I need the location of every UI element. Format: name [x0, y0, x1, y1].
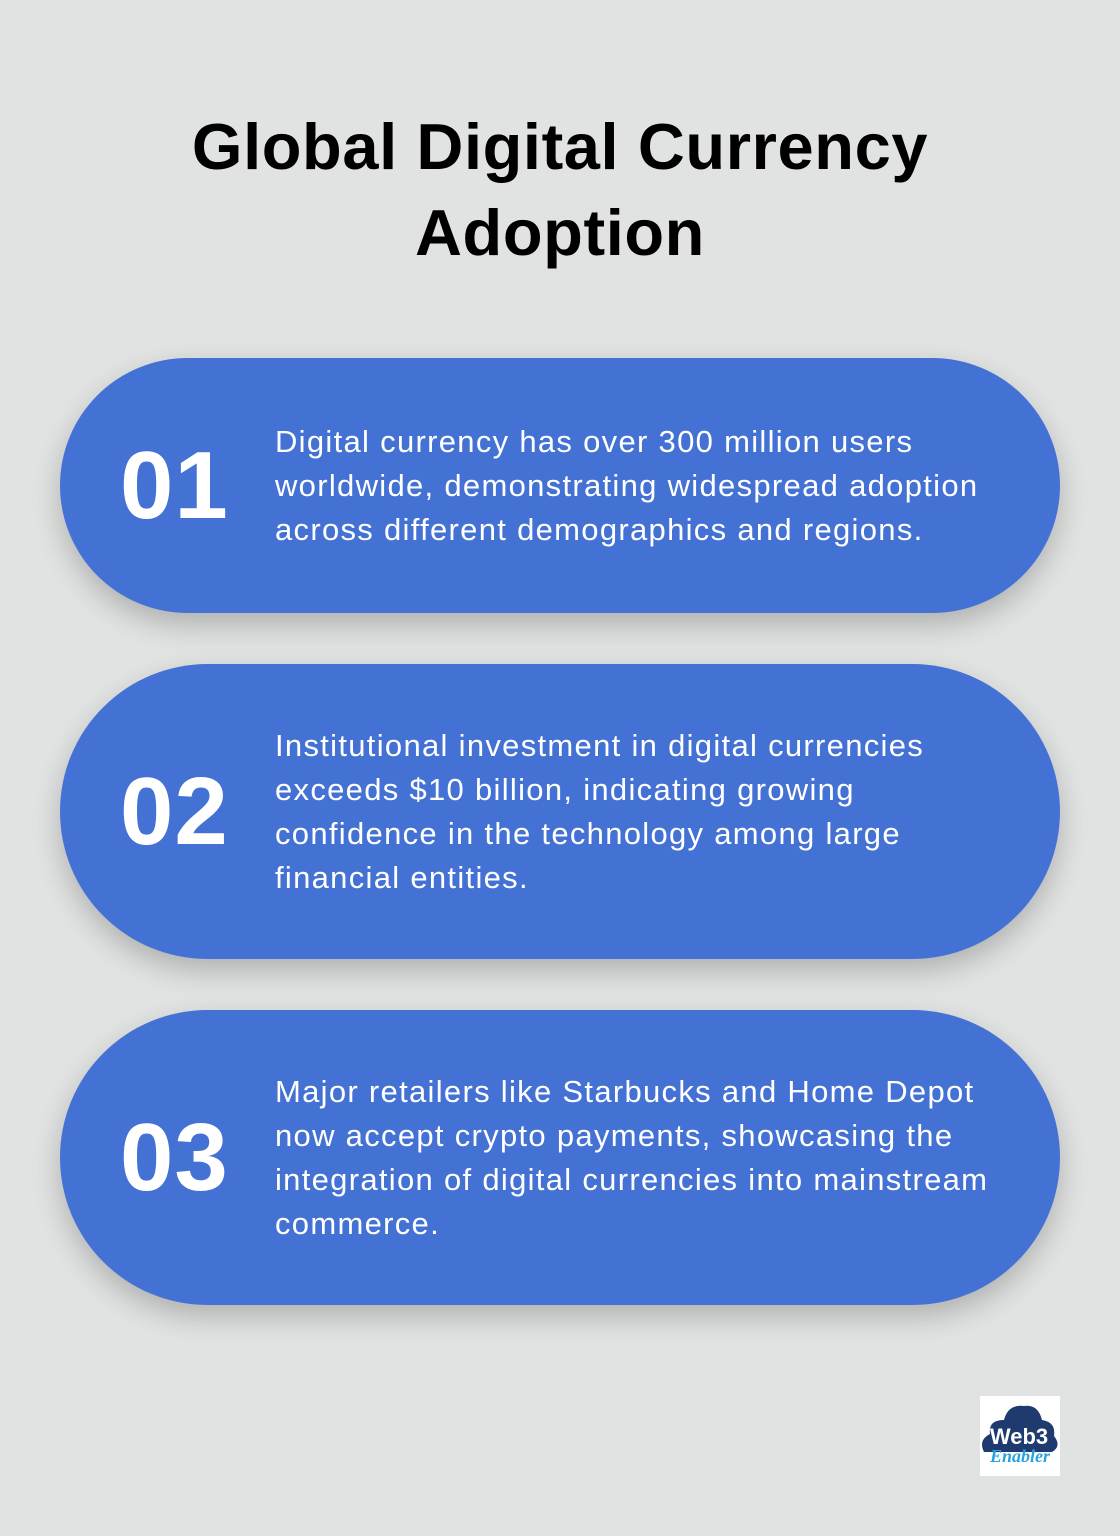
number 02: 02	[120, 758, 229, 864]
title: Global Digital Currency	[192, 110, 928, 183]
text 1: across different demographics and regions.	[275, 512, 924, 546]
text 3	[275, 1074, 988, 1240]
number 03: 03	[120, 1104, 229, 1210]
text 2: Institutional investment in digital currencies	[275, 728, 924, 762]
text 2: confidence in the technology among large	[275, 816, 901, 850]
logo	[980, 1396, 1060, 1476]
card 3	[60, 1010, 1060, 1305]
logo: Web3	[990, 1424, 1048, 1449]
card 1	[60, 358, 1060, 613]
text 3: commerce.	[275, 1206, 440, 1240]
card 2	[60, 664, 1060, 959]
text 3: Major retailers like Starbucks and Home Depot	[275, 1074, 974, 1108]
text 1: worldwide, demonstrating widespread adoption	[275, 468, 978, 502]
text 1: Digital currency has over 300 million users	[275, 424, 913, 458]
logo: Enabler	[989, 1446, 1051, 1466]
text 1	[275, 424, 978, 546]
text 3: integration of digital currencies into mainstream	[275, 1162, 988, 1196]
text 2: financial entities.	[275, 860, 529, 894]
number 01: 01	[120, 432, 229, 538]
text 2: exceeds $10 billion, indicating growing	[275, 772, 855, 806]
text 2	[275, 728, 924, 894]
title	[192, 110, 928, 269]
title: Adoption	[415, 196, 705, 269]
text 3: now accept crypto payments, showcasing the	[275, 1118, 953, 1152]
